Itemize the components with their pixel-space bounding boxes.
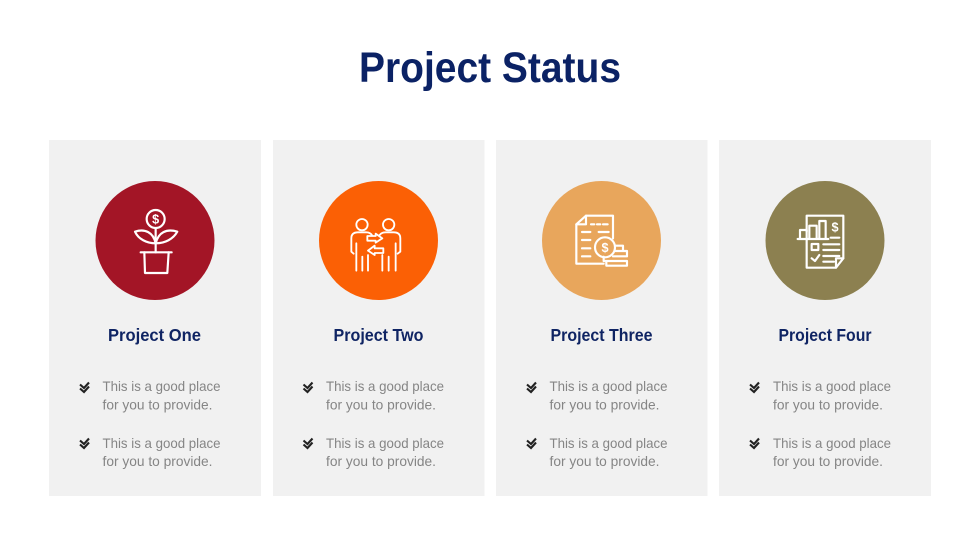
bullet 2: for you to provide. <box>102 453 212 469</box>
panel: project two <box>273 140 484 496</box>
heading: Project Three <box>550 325 653 345</box>
heading: Project One <box>108 325 201 345</box>
panel: project one <box>49 140 261 496</box>
icon: money plant <box>96 181 214 300</box>
icon: document with coins: $ <box>601 241 609 255</box>
bullet 1: This is a good place <box>773 378 891 394</box>
bullet 1: for you to provide. <box>102 396 212 412</box>
bullet 2: for you to provide. <box>550 453 660 469</box>
bullet 1: for you to provide. <box>773 396 883 412</box>
bullet 1 <box>527 378 668 412</box>
bullet 2: This is a good place <box>102 435 221 451</box>
heading: Project Two <box>334 325 424 345</box>
bullet 2: This is a good place <box>326 435 444 451</box>
bullet 2 <box>304 435 444 469</box>
bullet 2 <box>80 435 221 469</box>
bullet 1: This is a good place <box>550 378 668 394</box>
bullet 2: for you to provide. <box>773 453 883 469</box>
icon: money plant: $ <box>152 213 159 227</box>
bullet 1: for you to provide. <box>326 396 436 412</box>
title: Project Status <box>359 44 621 92</box>
bullet 2 <box>750 435 891 469</box>
bullet 2: This is a good place <box>550 435 668 451</box>
bullet 1: This is a good place <box>102 378 221 394</box>
bullet 1 <box>750 378 891 412</box>
bullet 1 <box>304 378 444 412</box>
heading: Project Four <box>778 325 872 345</box>
icon: financial report: $ <box>831 221 839 235</box>
icon: financial report <box>766 181 884 300</box>
icon: two people exchanging <box>319 181 438 300</box>
bullet 1 <box>80 378 221 412</box>
bullet 1: for you to provide. <box>550 396 660 412</box>
icon: document with coins <box>542 181 661 300</box>
panel: project three <box>496 140 708 496</box>
bullet 2: for you to provide. <box>326 453 436 469</box>
panel: project four <box>719 140 931 496</box>
bullet 2 <box>527 435 668 469</box>
bullet 2: This is a good place <box>773 435 891 451</box>
bullet 1: This is a good place <box>326 378 444 394</box>
